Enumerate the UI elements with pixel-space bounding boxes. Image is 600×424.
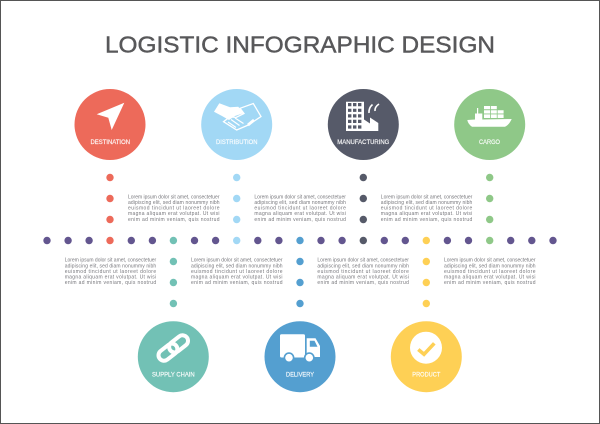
text block: far right: adipiscing elit, sed diam nonummy nibh <box>444 263 536 269</box>
text block: destination: magna aliquam erat volutpat. Ut wisi <box>128 211 220 217</box>
panel: delivery badge <box>264 321 336 392</box>
text block: product: Lorem ipsum dolor sit amet, consectetuer <box>317 258 409 264</box>
text block: far right <box>444 258 536 286</box>
connector dots: product <box>423 258 430 307</box>
text block: delivery: euismod tincidunt ut laoreet dolore <box>191 269 283 275</box>
icon: check mark <box>410 332 442 364</box>
text block: product: adipiscing elit, sed diam nonummy nibh <box>317 263 409 269</box>
text block: distribution <box>254 194 346 223</box>
text block: supply chain: enim ad minim veniam, quis nostrud <box>65 280 156 286</box>
panel: distribution badge <box>201 89 272 160</box>
text block: manufacturing: enim ad minim veniam, quis nostrud <box>381 217 473 223</box>
text block: destination: enim ad minim veniam, quis nostrud <box>128 217 220 223</box>
text block: distribution: enim ad minim veniam, quis nostrud <box>254 217 346 223</box>
text block: supply chain <box>65 258 157 286</box>
connector dots: supply chain <box>170 258 177 307</box>
text block: destination: adipiscing elit, sed diam nonummy nibh <box>128 200 220 206</box>
label: product: PRODUCT <box>412 373 441 379</box>
connector dots: cargo <box>486 174 493 223</box>
connector dots: manufacturing <box>360 174 367 223</box>
text block: far right: euismod tincidunt ut laoreet dolore <box>444 269 536 275</box>
title: LOGISTIC INFOGRAPHIC DESIGN <box>105 31 495 57</box>
text block: far right: enim ad minim veniam, quis nostrud <box>444 280 536 286</box>
label: destination: DESTINATION <box>90 140 130 146</box>
text block: destination <box>128 194 220 223</box>
label: distribution: DISTRIBUTION <box>216 140 258 146</box>
icon: truck <box>280 334 320 363</box>
icon: factory <box>346 102 379 131</box>
label: cargo: CARGO <box>479 140 500 146</box>
text block: delivery: adipiscing elit, sed diam nonummy nibh <box>191 263 283 269</box>
timeline dots <box>43 237 557 244</box>
panel: manufacturing badge <box>328 89 399 160</box>
panel: supply chain badge <box>138 321 209 392</box>
text block: delivery <box>191 258 283 286</box>
text block: distribution: magna aliquam erat volutpat. Ut wisi <box>254 211 346 217</box>
text block: manufacturing: adipiscing elit, sed diam nonummy nibh <box>381 200 473 206</box>
text block: manufacturing <box>381 194 473 223</box>
text block: delivery: magna aliquam erat volutpat. Ut wisi <box>191 274 282 280</box>
icon: chain link <box>156 333 190 363</box>
text block: supply chain: Lorem ipsum dolor sit amet, consectetuer <box>65 258 157 264</box>
connector dots: destination <box>106 174 114 223</box>
text block: delivery: Lorem ipsum dolor sit amet, consectetuer <box>191 258 283 264</box>
text block: far right: magna aliquam erat volutpat. Ut wisi <box>444 274 536 280</box>
text block: distribution: Lorem ipsum dolor sit amet, consectetuer <box>254 194 346 200</box>
label: manufacturing: MANUFACTURING <box>337 140 390 146</box>
text block: destination: Lorem ipsum dolor sit amet, consectetuer <box>128 194 220 200</box>
text block: distribution: adipiscing elit, sed diam nonummy nibh <box>254 200 346 206</box>
text block: manufacturing: euismod tincidunt ut laoreet dolore <box>381 206 473 212</box>
text block: delivery: enim ad minim veniam, quis nostrud <box>191 280 283 286</box>
text block: product: magna aliquam erat volutpat. Ut wisi <box>317 274 409 280</box>
icon: handshake <box>214 103 261 130</box>
text block: product: enim ad minim veniam, quis nostrud <box>317 280 409 286</box>
connector dots: delivery <box>296 258 304 307</box>
panel: cargo badge <box>454 89 525 160</box>
text block: manufacturing: Lorem ipsum dolor sit amet, consectetuer <box>381 194 473 200</box>
text block: destination: euismod tincidunt ut laoreet dolore <box>128 206 220 212</box>
text block: far right: Lorem ipsum dolor sit amet, consectetuer <box>444 258 536 264</box>
icon: container ship <box>467 106 512 127</box>
panel: destination badge <box>74 89 146 160</box>
icon: navigation arrow <box>97 103 124 130</box>
label: supply chain: SUPPLY CHAIN <box>152 373 195 379</box>
panel: product badge <box>391 321 462 392</box>
text block: product: euismod tincidunt ut laoreet dolore <box>317 269 409 275</box>
text block: supply chain: euismod tincidunt ut laoreet dolore <box>65 269 156 275</box>
text block: supply chain: adipiscing elit, sed diam nonummy nibh <box>65 263 156 269</box>
text block: manufacturing: magna aliquam erat volutpat. Ut wisi <box>381 211 472 217</box>
connector dots: distribution <box>233 174 240 223</box>
label: delivery: DELIVERY <box>286 373 314 379</box>
text block: distribution: euismod tincidunt ut laoreet dolore <box>254 206 346 212</box>
text block: supply chain: magna aliquam erat volutpat. Ut wisi <box>65 274 156 280</box>
text block: product <box>317 258 409 286</box>
